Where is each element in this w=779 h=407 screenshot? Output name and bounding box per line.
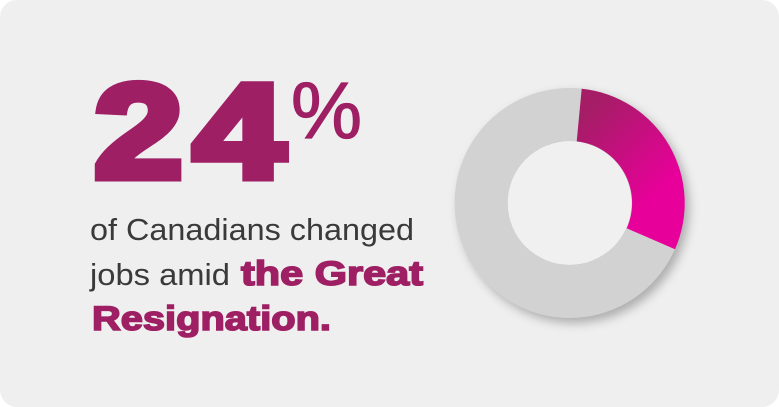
- donut chart: [455, 88, 689, 323]
- digit 4: 4: [193, 58, 285, 206]
- headline: 24%: [94, 58, 362, 206]
- donut base cover: [455, 88, 685, 318]
- line 2 highlight: the Great: [241, 255, 423, 293]
- segment 28 percent: [577, 89, 685, 249]
- donut shadow: [459, 93, 689, 323]
- percent sign: %: [291, 66, 362, 155]
- inner hole: [508, 141, 632, 265]
- line 1: of Canadians changed: [90, 212, 414, 247]
- line 2 regular: jobs amid: [89, 257, 230, 292]
- description text: [89, 212, 423, 338]
- digit 2: 2: [94, 58, 183, 206]
- line 3 highlight: Resignation.: [92, 300, 331, 338]
